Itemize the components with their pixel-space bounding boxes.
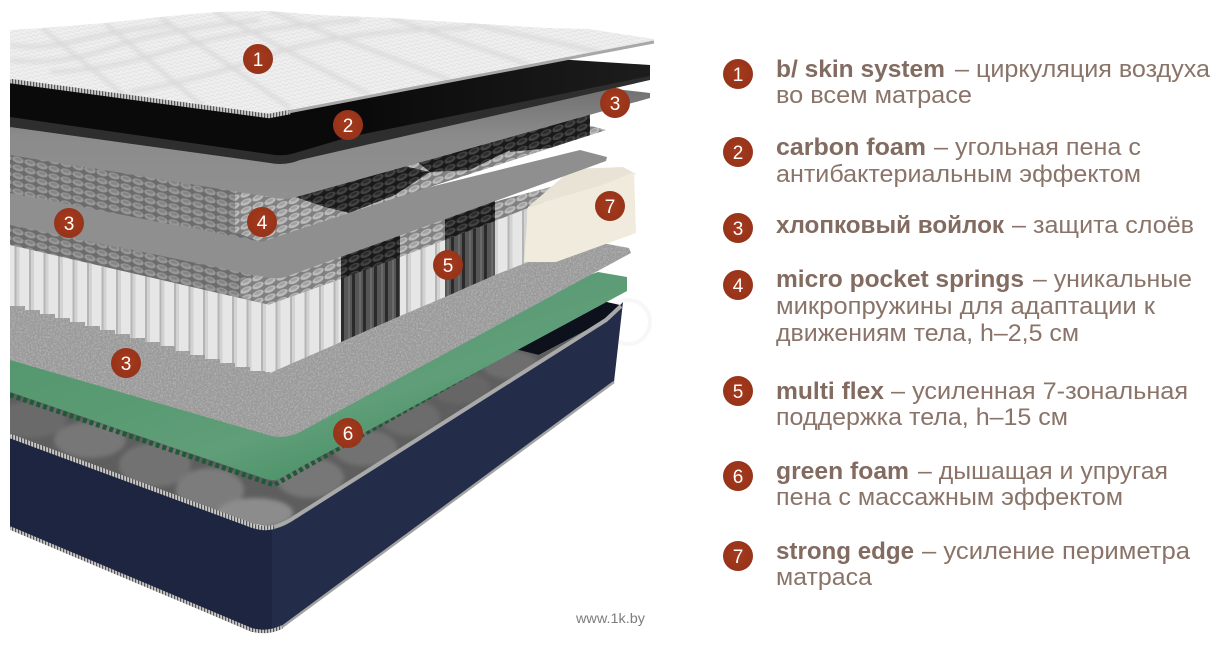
legend item 6 (723, 458, 1168, 511)
legend badge 2: 2 (733, 143, 743, 164)
legend badge 4 (723, 270, 753, 300)
badge 3 on middle felt: 3 (64, 214, 74, 235)
badge 3 on lower felt (111, 348, 141, 378)
legend item 7 (723, 538, 1191, 591)
layer: lower cotton felt (10, 243, 631, 437)
badge 7 on foam edge (595, 191, 625, 221)
legend badge 5: 5 (733, 382, 743, 403)
legend text 1: – циркуляция воздуха (955, 56, 1211, 83)
badge 4 on pocket springs: 4 (257, 213, 268, 234)
foam block face (524, 172, 636, 262)
white column section (495, 208, 528, 275)
base right side (272, 302, 623, 632)
legend badge 3 (723, 213, 753, 243)
legend text 1: во всем матрасе (776, 82, 972, 109)
legend text 4: микропружины для адаптации к (776, 293, 1156, 320)
quilted seams (10, 11, 600, 108)
legend text 3: хлопковый войлок (776, 212, 1005, 239)
source caption: www.1k.by (575, 610, 645, 626)
watermark ring (606, 300, 650, 344)
legend text 2: – угольная пена с (934, 134, 1141, 161)
dark column section (445, 221, 495, 297)
legend badge 1 (723, 59, 753, 89)
badge 2 on mattress (333, 110, 363, 140)
legend text 7: strong edge (776, 538, 914, 565)
layer: strong edge foam block (524, 167, 636, 262)
legend text 2: антибактериальным эффектом (776, 161, 1141, 188)
carbon foam rim (10, 75, 650, 164)
legend badge 6: 6 (733, 467, 743, 488)
layer: micro pocket springs (10, 113, 606, 242)
light corner springs (235, 192, 348, 242)
left spring columns (10, 245, 270, 372)
layer: carbon foam (10, 58, 650, 164)
legend text 6: green foam (776, 458, 909, 485)
legend text 6: – дышащая и упругая (918, 458, 1168, 485)
base upper piping, right (274, 306, 621, 527)
quilted surface (10, 11, 654, 115)
white column section (400, 240, 445, 316)
badge 3 on top felt: 3 (610, 94, 620, 115)
legend text 7 (776, 538, 1191, 591)
legend badge 2 (723, 137, 753, 167)
badge 4 on pocket springs (247, 207, 277, 237)
legend text 4: – уникальные (1033, 266, 1192, 293)
badge 1 on mattress: 1 (253, 50, 263, 71)
layer: multi flex spring block (10, 186, 552, 373)
spring coil tops (10, 186, 552, 304)
green foam teeth (10, 361, 497, 487)
badge 5 on spring block: 5 (443, 256, 453, 277)
base quilted top (10, 331, 585, 527)
dark springs (505, 113, 590, 152)
dark springs (418, 138, 510, 172)
base inner cavity (518, 302, 620, 355)
legend text 5: – усиленная 7-зональная (891, 378, 1188, 405)
light right springs (349, 126, 606, 213)
legend list (723, 56, 1211, 591)
legend item 4 (723, 266, 1192, 347)
legend badge 4: 4 (733, 276, 744, 297)
legend badge 7 (723, 541, 753, 571)
legend text 5: multi flex (776, 378, 885, 405)
corner coil tops (240, 187, 551, 304)
legend text 7: матраса (776, 564, 873, 591)
legend text 6 (776, 458, 1168, 511)
legend text 4: micro pocket springs (776, 266, 1024, 293)
legend text 2: carbon foam (776, 134, 926, 161)
legend badge 7: 7 (733, 547, 743, 568)
legend text 3: – защита слоёв (1012, 212, 1194, 239)
layer: upper cotton felt (10, 85, 650, 199)
legend text 5 (776, 378, 1188, 431)
legend text 1: b/ skin system (776, 56, 945, 83)
badge 2 on mattress: 2 (343, 116, 353, 137)
base left side (10, 436, 274, 632)
layer: quilted b/ skin (10, 11, 654, 116)
legend item 2 (723, 134, 1141, 188)
foam block top (528, 167, 636, 207)
badge 3 on middle felt (54, 208, 84, 238)
legend text 7: – усиление периметра (922, 538, 1191, 565)
badge 6 on green foam: 6 (343, 424, 353, 445)
base springs section (10, 118, 606, 242)
layer: green foam (10, 272, 627, 485)
badge 7 on foam edge: 7 (605, 197, 615, 218)
badge 3 on lower felt: 3 (121, 354, 131, 375)
quilted edge piping, right (288, 42, 654, 112)
legend badge 1: 1 (733, 65, 743, 86)
base lower piping, left (10, 528, 282, 631)
legend text 4: движениям тела, h–2,5 см (776, 320, 1079, 347)
dark coil tops (445, 201, 495, 240)
base upper piping, left (10, 436, 274, 528)
legend text 6: пена с массажным эффектом (776, 484, 1123, 511)
legend text 5: поддержка тела, h–15 см (776, 404, 1068, 431)
panel: mattress cross-section (0, 11, 654, 632)
carbon foam body (10, 58, 650, 155)
legend text 3 (776, 212, 1194, 239)
legend item 3 (723, 212, 1194, 243)
dark coil tops (341, 236, 400, 279)
badge 3 on top felt (600, 88, 630, 118)
legend badge 3: 3 (733, 219, 743, 240)
legend badge 6 (723, 461, 753, 491)
base: navy mattress base (0, 300, 640, 632)
base lower piping, right (282, 382, 614, 627)
badge 6 on green foam (333, 418, 363, 448)
legend badge 5 (723, 376, 753, 406)
legend text 2 (776, 134, 1141, 188)
dark springs (292, 165, 430, 213)
legend item 5 (723, 376, 1188, 431)
legend text 4 (776, 266, 1192, 347)
badge 1 on mattress (243, 44, 273, 74)
layer: middle cotton felt (10, 150, 607, 278)
green foam body (10, 272, 627, 480)
dark column section (341, 257, 400, 342)
right white columns corner (268, 279, 341, 373)
quilted edge piping, left (10, 81, 290, 116)
legend text 1 (776, 56, 1211, 109)
legend item 1 (723, 56, 1211, 109)
badge 5 on spring block (433, 250, 463, 280)
